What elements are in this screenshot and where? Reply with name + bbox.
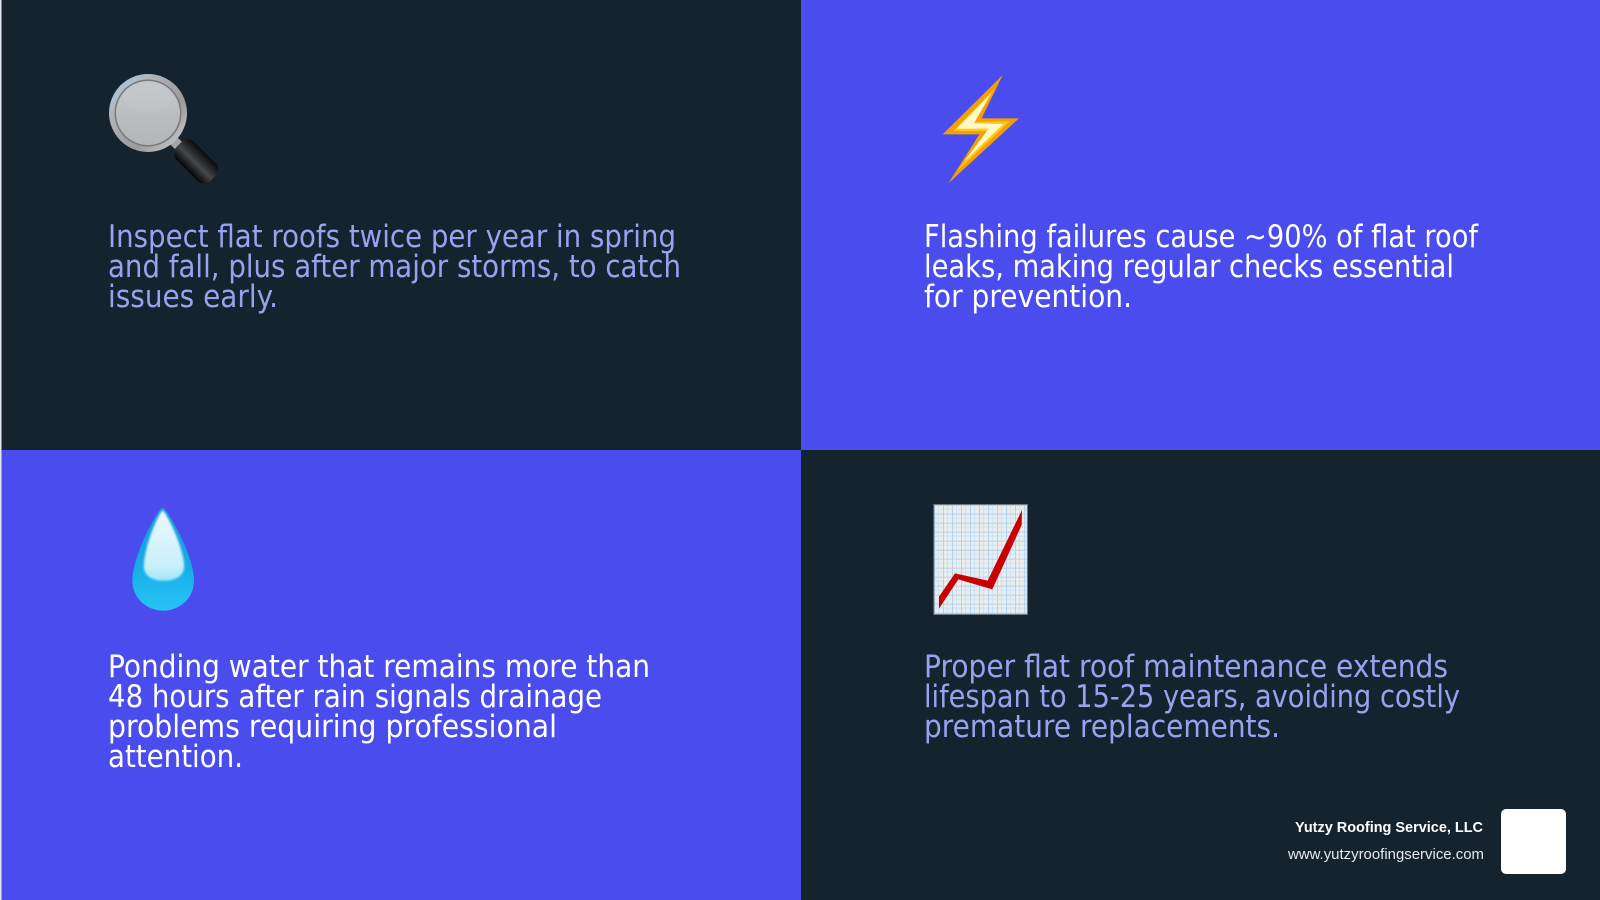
- text: inspection: Inspect flat roofs twice per year in spring: [108, 219, 676, 255]
- panel: lifespan: [801, 450, 1600, 900]
- text: ponding water: [108, 649, 650, 775]
- icon: lightning bolt: [943, 75, 1019, 183]
- text: inspection: issues early.: [108, 279, 278, 315]
- text: lifespan: Proper flat roof maintenance extends: [924, 649, 1448, 685]
- footer: website: www.yutzyroofingservice.com: [1287, 846, 1484, 863]
- text: lifespan: [924, 649, 1460, 745]
- text: inspection: [108, 219, 681, 315]
- icon: magnifying glass: [109, 74, 222, 187]
- panel: inspection schedule: [2, 0, 801, 450]
- text: ponding water: Ponding water that remains more than: [108, 649, 650, 685]
- left edge strip: [0, 0, 2, 900]
- text: ponding water: attention.: [108, 739, 243, 775]
- footer: company name: Yutzy Roofing Service, LLC: [1295, 819, 1483, 836]
- text: ponding water: problems requiring professional: [108, 709, 557, 745]
- icon: rising chart: [934, 505, 1027, 614]
- text: ponding water: 48 hours after rain signals drainage: [108, 679, 602, 715]
- text: flashing: [924, 219, 1479, 315]
- text: flashing: for prevention.: [924, 279, 1132, 315]
- logo placeholder: [1501, 809, 1566, 874]
- text: inspection: and fall, plus after major storms, to catch: [108, 249, 681, 285]
- text: lifespan: lifespan to 15-25 years, avoiding costly: [924, 679, 1460, 715]
- icon: water drop: [132, 507, 194, 611]
- panel: ponding water: [2, 450, 801, 900]
- text: lifespan: premature replacements.: [924, 709, 1280, 745]
- text: flashing: leaks, making regular checks essential: [924, 249, 1454, 285]
- panel: flashing failures: [801, 0, 1600, 450]
- text: flashing: Flashing failures cause ~90% of flat roof: [924, 219, 1479, 255]
